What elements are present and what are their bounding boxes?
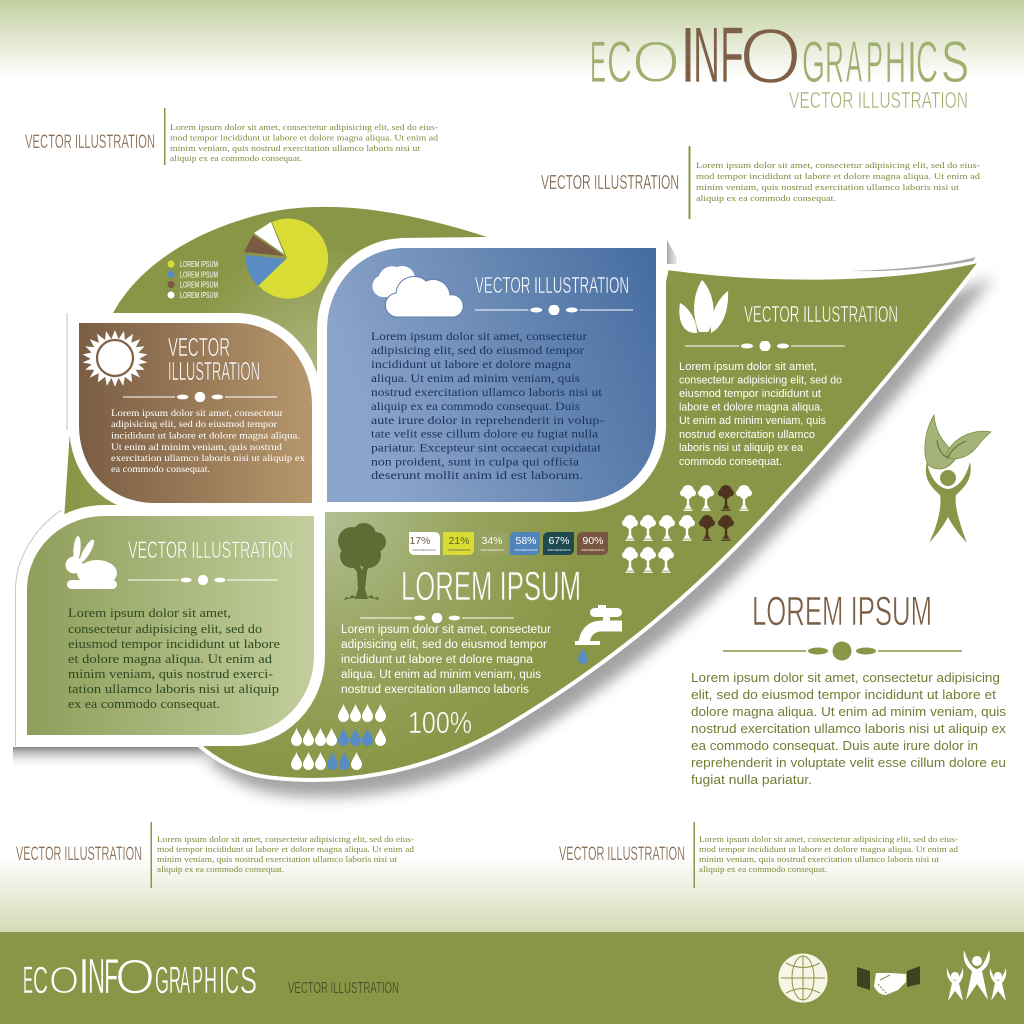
title: eco infographics: N <box>693 10 720 99</box>
chart legend: LOREM IPSUM <box>180 259 218 269</box>
footer title: A <box>180 960 190 1002</box>
percentage badges: 90% <box>582 535 604 547</box>
text: light green panel: Lorem ipsum dolor sit amet, <box>68 606 231 620</box>
text: blue panel: aliquip ex ea commodo consequat. Duis <box>371 401 581 413</box>
text: light green panel <box>68 606 280 711</box>
text block: top right: aliquip ex ea commodo consequat. <box>696 193 836 203</box>
divider: middle <box>360 613 514 623</box>
panel: blue <box>327 248 656 502</box>
text block: top left: aliquip ex ea commodo consequat. <box>170 153 302 163</box>
percentage badges: INFOGRAPHICS <box>582 548 604 552</box>
percentage badges: INFOGRAPHICS <box>448 548 470 552</box>
heading: brown panel: VECTOR <box>168 332 230 362</box>
icon: sun <box>83 330 147 387</box>
footer title: G <box>155 960 169 1002</box>
text: right body: ea commodo consequat. Duis aute irure dolor in <box>691 738 978 753</box>
text: middle panel <box>341 624 551 696</box>
text: right leaf: labore et dolore magna aliqua. <box>679 402 823 414</box>
footer subtitle: VECTOR ILLUSTRATION <box>288 980 399 997</box>
text: blue panel: nostrud exercitation ullamco laboris nisi ut <box>371 387 603 399</box>
text: middle panel: incididunt ut labore et dolore magna <box>341 654 534 666</box>
footer title: E <box>23 960 33 1002</box>
heading: blue panel: VECTOR ILLUSTRATION <box>475 272 629 298</box>
thin edge line <box>66 313 68 430</box>
text: blue panel: aliqua. Ut enim ad minim veniam, quis <box>371 373 581 385</box>
icon: people <box>947 950 1006 1001</box>
divider: blue panel <box>475 305 633 315</box>
text: blue panel: deserunt mollit anim id est laborum. <box>371 470 583 482</box>
text: light green panel: ex ea commodo consequat. <box>68 697 220 711</box>
text: brown panel: adipisicing elit, sed do eiusmod tempor <box>111 419 278 430</box>
curled top edge shadow <box>850 257 976 271</box>
text block: top right: mod tempor incididunt ut labore et dolore magna aliqua. Ut enim ad <box>696 171 981 181</box>
bottom background gradient <box>0 855 1024 932</box>
text block: top left: minim veniam, quis nostrud exercitation ullamco laboris nisi ut <box>170 143 421 153</box>
icon: handshake <box>857 966 920 996</box>
title: eco infographics <box>590 10 969 113</box>
footer title: F <box>104 950 119 1004</box>
text block: bottom right: mod tempor incididunt ut labore et dolore magna aliqua. Ut enim ad <box>699 845 959 854</box>
text: light green panel: consectetur adipisicing elit, sed do <box>68 622 262 636</box>
footer title: I <box>219 960 225 1002</box>
text: middle panel: adipisicing elit, sed do eiusmod tempor <box>341 639 547 651</box>
text: blue panel: adipisicing elit, sed do eiusmod tempor <box>371 345 584 357</box>
text block: top left: Lorem ipsum dolor sit amet, consectetur adipisicing elit, sed do eius- <box>170 122 438 132</box>
text: right leaf: laboris nisi ut aliquip ex ea <box>679 442 804 454</box>
icon: water tap <box>575 605 622 664</box>
icon: dark tree <box>338 523 386 600</box>
text: right body: nostrud exercitation ullamco laboris nisi ut aliquip ex <box>691 721 1007 736</box>
heading: lorem ipsum: LOREM IPSUM <box>401 563 581 609</box>
title: eco infographics: C <box>607 30 632 95</box>
title: eco infographics: S <box>941 30 969 95</box>
footer title: C <box>33 960 48 1002</box>
text: blue panel: Lorem ipsum dolor sit amet, consectetur <box>371 331 587 343</box>
title: eco infographics: G <box>802 30 825 95</box>
panel: brown <box>79 323 312 503</box>
text block: top left: VECTOR ILLUSTRATION <box>25 132 155 153</box>
text: brown panel: ea commodo consequat. <box>111 464 210 475</box>
icon grid: water drops <box>291 704 386 770</box>
title: eco infographics: P <box>866 30 883 95</box>
chart legend: LOREM IPSUM <box>180 290 218 300</box>
footer title: O <box>115 950 155 1004</box>
icon: globe <box>779 954 827 1002</box>
text block: top left: mod tempor incididunt ut labore et dolore magna aliqua. Ut enim ad <box>170 132 439 142</box>
percentage badges: 34% <box>481 535 503 547</box>
icon grid: trees <box>622 485 752 573</box>
title: eco infographics: R <box>825 30 844 95</box>
footer band <box>0 932 1024 1024</box>
footer title: P <box>192 960 203 1002</box>
text: blue panel: tate velit esse cillum dolore eu fugiat nulla <box>371 428 598 440</box>
title: eco infographics: H <box>885 30 906 95</box>
text block: bottom left: minim veniam, quis nostrud exercitation ullamco laboris nisi ut <box>157 855 398 864</box>
text: right body: elit, sed do eiusmod tempor incididunt ut labore et <box>691 687 996 702</box>
text: middle panel: aliqua. Ut enim ad minim veniam, quis <box>341 669 541 681</box>
chart legend: LOREM IPSUM <box>180 280 218 290</box>
text block: top right: minim veniam, quis nostrud exercitation ullamco laboris nisi ut <box>696 182 960 192</box>
leaf shadow <box>206 277 993 797</box>
percentage badges: 67% <box>548 535 570 547</box>
text block: bottom left <box>16 822 415 888</box>
top background gradient <box>0 0 1024 78</box>
text: brown panel <box>111 408 305 475</box>
title: eco infographics: A <box>846 30 862 95</box>
text block: bottom left: Lorem ipsum dolor sit amet, consectetur adipisicing elit, sed do eius- <box>157 835 414 844</box>
panel: brown: ILLUSTRATION <box>168 356 260 386</box>
text: right leaf: commodo consequat. <box>679 456 782 468</box>
footer title: N <box>88 950 105 1004</box>
icon: leaves <box>679 280 728 333</box>
panel: light green <box>16 510 314 746</box>
text: middle panel: nostrud exercitation ullamco laboris <box>341 684 529 696</box>
icon: rabbit <box>66 536 117 589</box>
text: blue panel: pariatur. Excepteur sint occaecat cupidatat <box>371 442 602 454</box>
text: right body: dolore magna aliqua. Ut enim ad minim veniam, quis <box>691 704 1007 719</box>
text: blue panel: non proident, sunt in culpa qui officia <box>371 456 579 468</box>
divider: right <box>723 642 962 660</box>
percentage badges: INFOGRAPHICS <box>413 548 435 552</box>
percentage badges: INFOGRAPHICS <box>481 548 503 552</box>
text: right leaf: nostrud exercitation ullamco <box>679 429 815 441</box>
footer title: I <box>79 950 89 1004</box>
percentage badges <box>409 532 608 555</box>
title: eco infographics: I <box>907 30 917 95</box>
stat: 100 percent: 100% <box>408 705 472 740</box>
text block: bottom left: aliquip ex ea commodo consequat. <box>157 865 284 874</box>
footer title: C <box>225 960 239 1002</box>
title: eco infographics: O <box>739 11 802 100</box>
text block: top right: VECTOR ILLUSTRATION <box>541 172 679 194</box>
text: right leaf: Ut enim ad minim veniam, quis <box>679 415 826 427</box>
title: eco infographics: F <box>720 10 744 99</box>
text: right leaf <box>679 361 842 468</box>
panel shadow: light green <box>13 747 213 769</box>
icon: clouds <box>372 266 463 317</box>
text: right body: fugiat nulla pariatur. <box>691 772 812 787</box>
footer title: H <box>204 960 217 1002</box>
footer title <box>23 950 257 1004</box>
divider: brown panel <box>123 392 277 402</box>
text block: top left <box>25 108 439 165</box>
text: light green panel: et dolore magna aliqua. Ut enim ad <box>68 652 272 666</box>
divider: right leaf <box>685 341 845 351</box>
text block: bottom left: mod tempor incididunt ut labore et dolore magna aliqua. Ut enim ad <box>157 845 415 854</box>
title: eco infographics: E <box>590 30 606 95</box>
text: right body: Lorem ipsum dolor sit amet, consectetur adipisicing <box>691 670 1000 685</box>
text block: bottom left: VECTOR ILLUSTRATION <box>16 844 142 865</box>
chart legend: LOREM IPSUM <box>180 270 218 280</box>
footer title: R <box>169 960 181 1002</box>
text: right leaf: consectetur adipisicing elit, sed do <box>679 374 842 386</box>
heading: light green panel: VECTOR ILLUSTRATION <box>128 537 293 564</box>
text block: bottom right: aliquip ex ea commodo consequat. <box>699 865 827 874</box>
text block: bottom right: minim veniam, quis nostrud exercitation ullamco laboris nisi ut <box>699 855 940 864</box>
footer title: O <box>49 960 79 1002</box>
text: brown panel: Ut enim ad minim veniam, quis nostrud <box>111 442 282 453</box>
percentage badges: 58% <box>515 535 537 547</box>
percentage badges: 17% <box>409 535 431 547</box>
text block: bottom right <box>559 822 959 888</box>
text: light green panel: eiusmod tempor incididunt ut labore <box>68 637 280 651</box>
heading: brown panel <box>168 332 260 386</box>
percentage badges: INFOGRAPHICS <box>548 548 570 552</box>
divider: light green panel <box>128 575 278 585</box>
text: right leaf: eiusmod tempor incididunt ut <box>679 388 821 400</box>
title: eco infographics: I <box>680 10 696 99</box>
text: right body <box>691 670 1007 787</box>
title: eco infographics: C <box>916 30 938 95</box>
text block: bottom right: Lorem ipsum dolor sit amet, consectetur adipisicing elit, sed do eius- <box>699 835 958 844</box>
text: blue panel: incididunt ut labore et dolore magna <box>371 359 571 371</box>
text: right body: reprehenderit in voluptate velit esse cillum dolore eu <box>691 755 1006 770</box>
text: blue panel: aute irure dolor in reprehenderit in volup- <box>371 415 604 427</box>
title: eco infographics: O <box>632 30 680 95</box>
pie chart <box>244 219 328 299</box>
text: middle panel: Lorem ipsum dolor sit amet, consectetur <box>341 624 551 636</box>
text: brown panel: Lorem ipsum dolor sit amet, consectetur <box>111 408 284 419</box>
paper fold <box>667 240 677 264</box>
chart legend <box>168 259 218 300</box>
text: light green panel: minim veniam, quis nostrud exerci- <box>68 667 273 681</box>
text: brown panel: incididunt ut labore et dolore magna aliqua. <box>111 430 300 442</box>
text: brown panel: exercitation ullamco laboris nisi ut aliquip ex <box>111 453 305 464</box>
text: blue panel <box>371 331 604 482</box>
text block: top right: Lorem ipsum dolor sit amet, consectetur adipisicing elit, sed do eius- <box>696 160 980 170</box>
percentage badges: INFOGRAPHICS <box>515 548 537 552</box>
footer title: S <box>240 960 257 1002</box>
heading: right leaf: VECTOR ILLUSTRATION <box>744 301 898 327</box>
text: right leaf: Lorem ipsum dolor sit amet, <box>679 361 817 373</box>
big green leaf <box>62 207 982 780</box>
percentage badges: 21% <box>448 535 470 547</box>
text block: bottom right: VECTOR ILLUSTRATION <box>559 844 685 865</box>
icon: person with leaves <box>925 415 991 543</box>
text block: top right <box>541 146 981 219</box>
text: light green panel: tation ullamco laboris nisi ut aliquip <box>68 682 279 696</box>
